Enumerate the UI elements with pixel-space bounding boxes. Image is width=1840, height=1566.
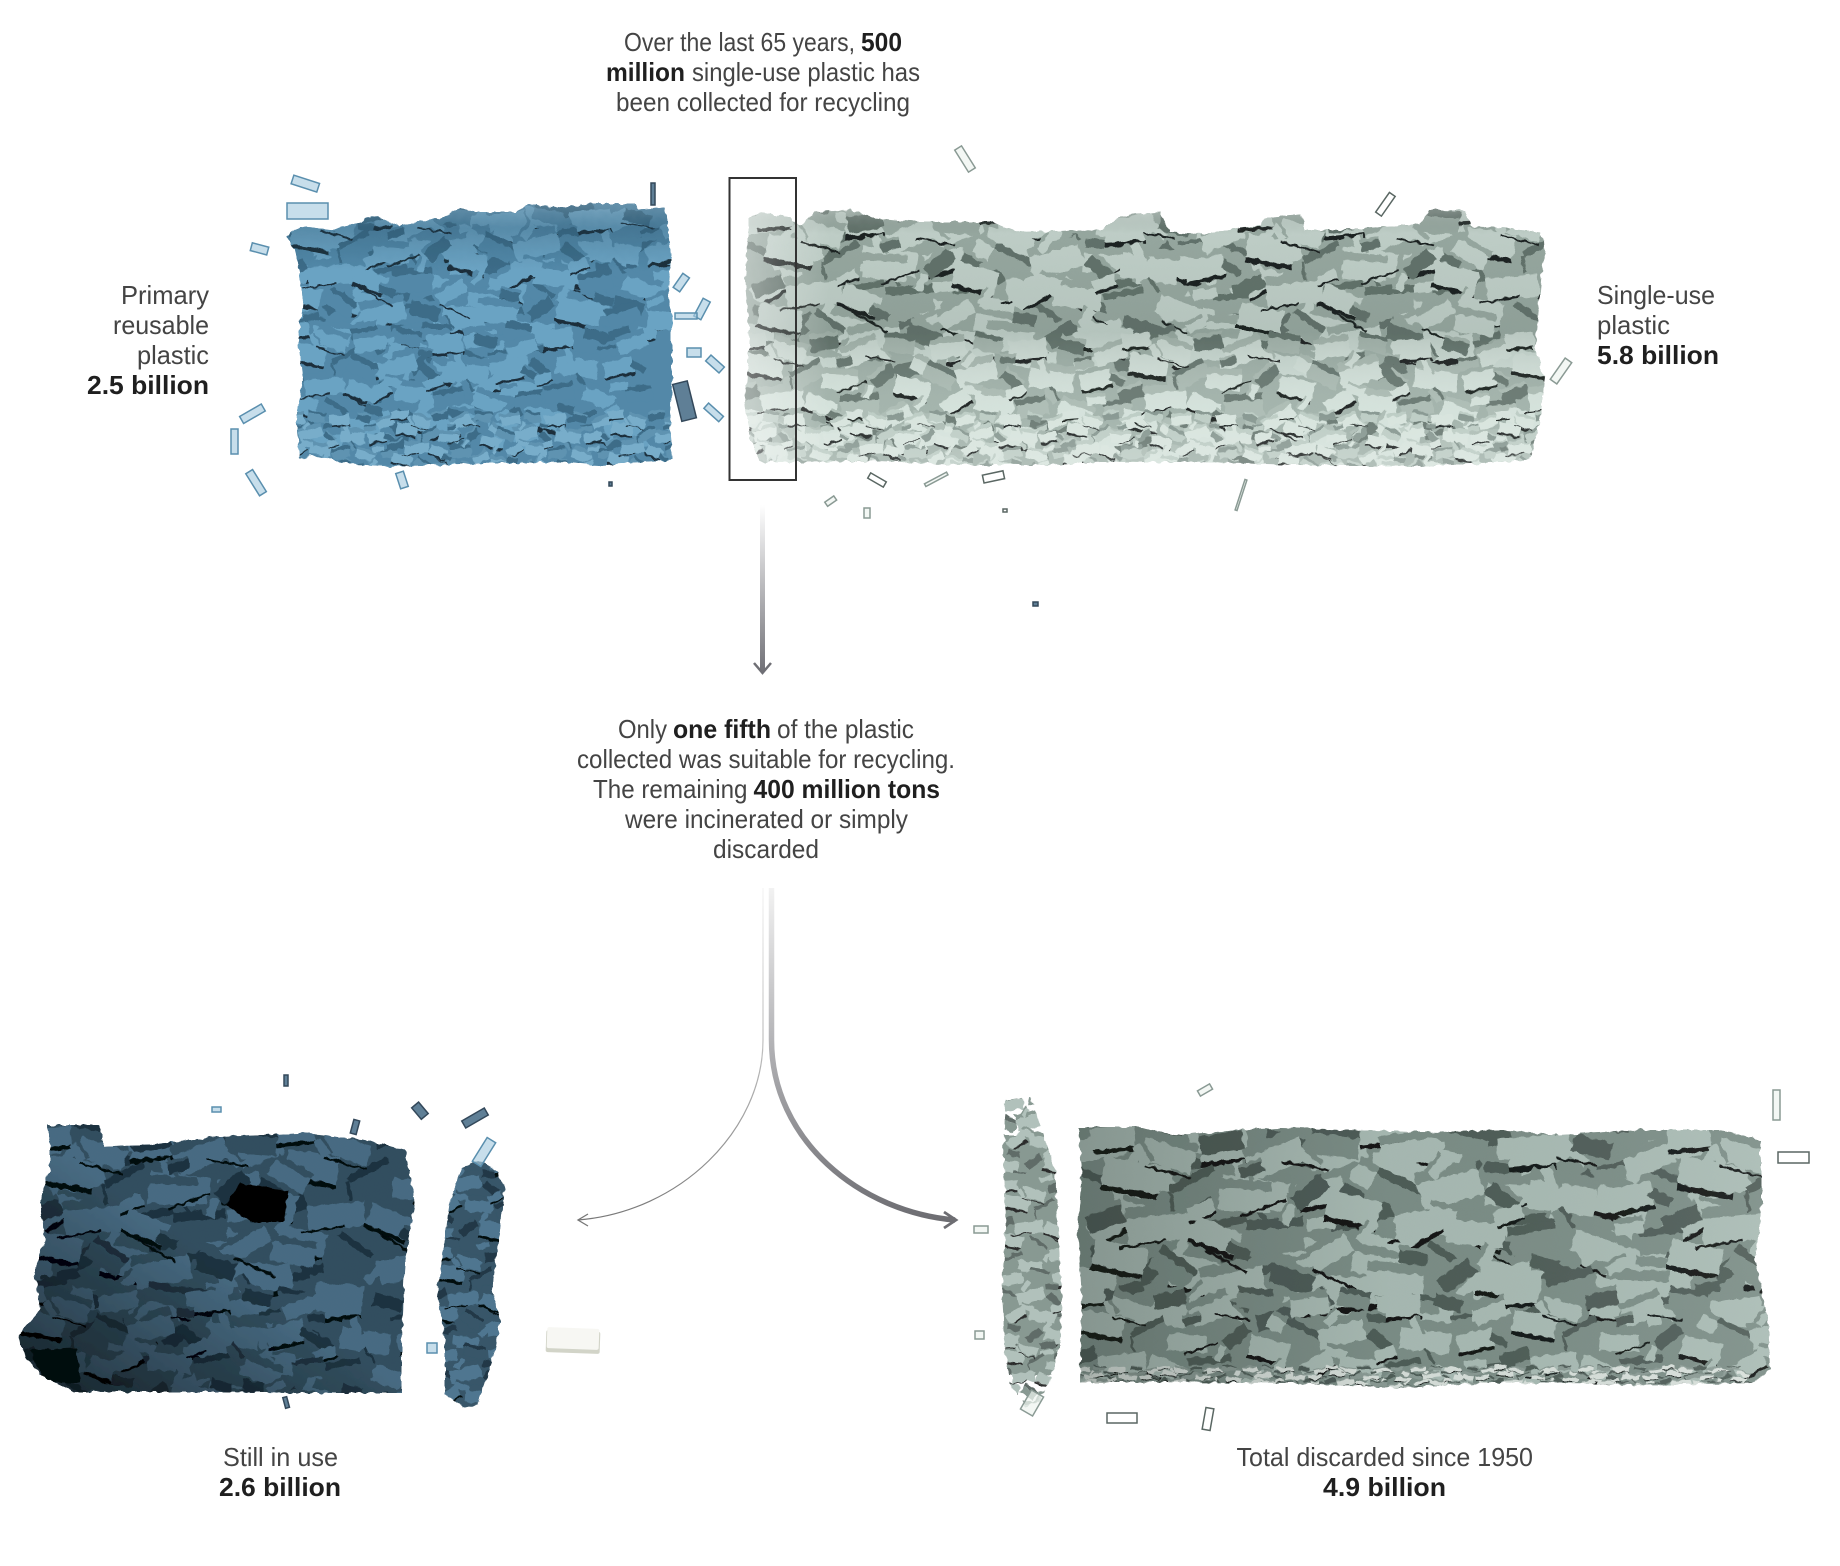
label: still in use 2.6 billion xyxy=(219,1442,341,1502)
label: primary reusable plastic 2.5 billion: plastic xyxy=(137,340,209,370)
fragment: white recycled block xyxy=(546,1327,600,1354)
text: single-use collection note: million xyxy=(606,57,685,87)
label: single-use plastic 5.8 billion: Single-use xyxy=(1597,280,1715,310)
fragments: loose blue blocks xyxy=(231,175,1038,606)
text: one fifth suitable for recycling note: were incinerated or simply xyxy=(624,804,908,834)
label: total discarded 4.9 billion: Total discarded since 1950 xyxy=(1236,1442,1533,1472)
pile: total discarded blocks xyxy=(974,1084,1840,1441)
text: single-use collection note: 500 xyxy=(861,27,902,57)
pile: total discarded side sliver xyxy=(1002,1097,1063,1408)
text: one fifth suitable for recycling note xyxy=(577,714,955,864)
fragments: loose grey-green blocks xyxy=(974,1084,1809,1431)
fragments: loose grey blocks xyxy=(825,146,1572,518)
pile: primary reusable plastic blocks xyxy=(231,175,1038,606)
pile: still in use blocks xyxy=(18,1074,600,1410)
pile: still in use side sliver xyxy=(436,1161,506,1408)
arrow: down to recycling note xyxy=(754,505,771,673)
label: total discarded 4.9 billion xyxy=(1236,1442,1533,1502)
label: single-use plastic 5.8 billion xyxy=(1597,280,1719,370)
text: one fifth suitable for recycling note: collected was suitable for recycling. xyxy=(577,744,955,774)
text: one fifth suitable for recycling note: 400 million tons xyxy=(754,774,940,804)
label: still in use 2.6 billion: Still in use xyxy=(223,1442,338,1472)
label: total discarded 4.9 billion: 4.9 billion xyxy=(1323,1472,1446,1502)
text: one fifth suitable for recycling note: one fifth xyxy=(673,714,771,744)
label: primary reusable plastic 2.5 billion: 2.5 billion xyxy=(87,370,209,400)
fragments: loose dark blue blocks xyxy=(212,1075,496,1408)
text: single-use collection note: been collected for recycling xyxy=(616,87,910,117)
text: single-use collection note: single-use plastic has xyxy=(692,57,920,87)
label: single-use plastic 5.8 billion: plastic xyxy=(1597,310,1670,340)
label: primary reusable plastic 2.5 billion: reusable xyxy=(113,310,209,340)
label: primary reusable plastic 2.5 billion xyxy=(87,280,209,400)
label: still in use 2.6 billion: 2.6 billion xyxy=(219,1472,341,1502)
text: single-use collection note xyxy=(606,27,920,117)
text: one fifth suitable for recycling note: discarded xyxy=(713,834,819,864)
label: single-use plastic 5.8 billion: 5.8 billion xyxy=(1597,340,1719,370)
text: one fifth suitable for recycling note: of the plastic xyxy=(777,714,914,744)
arrow: thick curve to total discarded xyxy=(772,888,956,1228)
label: primary reusable plastic 2.5 billion: Primary xyxy=(121,280,209,310)
text: one fifth suitable for recycling note: The remaining xyxy=(593,774,748,804)
text: single-use collection note: Over the last 65 years, xyxy=(624,27,855,57)
pile: single-use plastic blocks xyxy=(725,146,1717,518)
arrow: thin curve to still in use xyxy=(578,888,763,1226)
text: one fifth suitable for recycling note: Only xyxy=(618,714,667,744)
highlight box: collected share xyxy=(730,178,796,480)
